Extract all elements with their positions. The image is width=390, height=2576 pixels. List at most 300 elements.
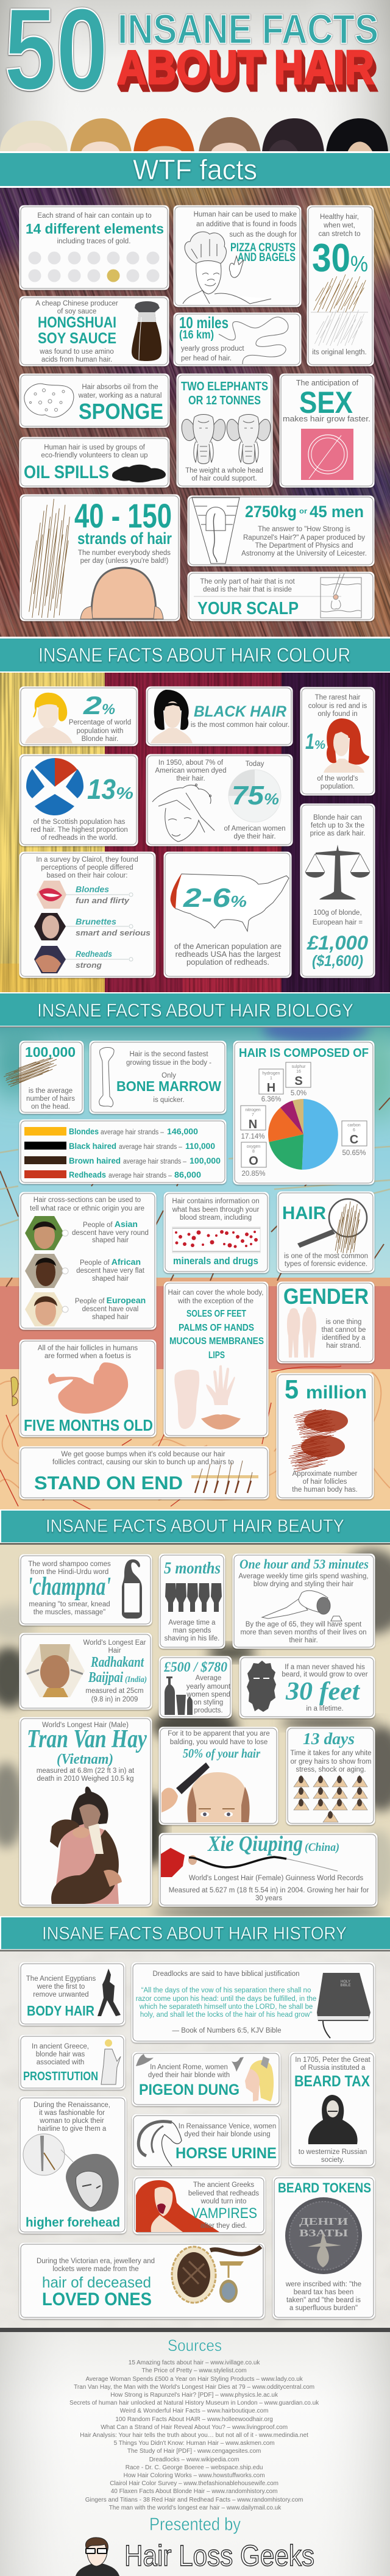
element: nitrogen: nitrogen — [245, 1108, 261, 1112]
heading: strands of hair: strands of hair — [77, 529, 172, 548]
panel: higher forehead — [20, 2098, 125, 2232]
heading: Vietnam: (Vietnam) — [57, 1751, 113, 1767]
section background: WTF — [0, 188, 390, 637]
legend: black haired: average hair strands – — [119, 1143, 183, 1151]
text: blondes: Blondes — [76, 885, 109, 894]
text: longest ear: World's Longest Ear — [83, 1639, 146, 1647]
legend: redheads: Redheads — [69, 1170, 106, 1179]
panel: body hair — [21, 1964, 124, 2024]
text: whole head: The weight a whole head — [185, 467, 263, 474]
text: weekly time: blow drying and styling their hair — [254, 1581, 353, 1588]
icon: balance scales — [305, 845, 370, 900]
heading: sponge: SPONGE — [79, 399, 163, 424]
element: carbon: 6 — [353, 1128, 355, 1132]
panel: your scalp — [189, 573, 373, 620]
text: ancient Greece: associated with — [37, 2059, 84, 2066]
panel: hour and 53 minutes — [234, 1555, 374, 1647]
text: sheds per day: The number everybody sheds — [78, 549, 171, 557]
panel: 14 different elements — [21, 207, 168, 288]
panel: dye 75% — [147, 756, 291, 845]
text: rarest: colour is red and is — [308, 703, 367, 710]
icon: USA map — [171, 874, 289, 931]
text: whole body: with the exception of the — [177, 1298, 254, 1305]
sources list: 15 Amazing facts about hair – www.ivillage.co.uk — [129, 2360, 260, 2366]
stat: 30%: 30 — [312, 235, 350, 280]
legend: black haired: 110,000 — [185, 1141, 215, 1151]
text: never shaved: If a man never shaved his — [285, 1664, 365, 1671]
text: age of 65: By the age of 65, they will have spent — [246, 1621, 362, 1628]
heading: oil spills: OIL SPILLS — [24, 462, 109, 482]
text: whole head: of hair could support. — [191, 475, 257, 482]
banner: hair biology — [0, 992, 390, 1028]
section background: colour — [0, 673, 390, 992]
panel: pigeon dung — [133, 2053, 279, 2105]
panel: 40-150 strands — [21, 496, 179, 620]
element: sulphur: sulphur — [292, 1065, 306, 1069]
text: weekly time: Average weekly time girls spend washing, — [238, 1573, 369, 1580]
icon: connector circle — [62, 1230, 68, 1236]
banner: hair beauty: INSANE FACTS ABOUT HAIR BEAUTY — [46, 1516, 344, 1536]
text: biblical: Dreadlocks are said to have biblical justification — [153, 1970, 299, 1978]
element: hydrogen: hydrogen — [262, 1072, 280, 1076]
heading: soles of feet: SOLES OF FEET — [186, 1309, 246, 1319]
panel: 10 miles — [175, 313, 300, 365]
panel: cross-sections and race — [21, 1193, 155, 1328]
text: additive: Human hair can be used to make — [194, 211, 297, 218]
sources list: The Study of Hair [PDF] - www.cengagesites.com — [127, 2448, 261, 2455]
sources list: What Can a Strand of Hair Reveal About You? – www.livingproof.com — [101, 2424, 288, 2431]
heading: sex: SEX — [299, 385, 353, 420]
text: only part: The only part of hair that is not — [200, 578, 295, 585]
legend: brown haired — [24, 1156, 221, 1165]
heading: Radhakant: Radhakant — [90, 1655, 144, 1670]
text: Peter the Great: In 1705, Peter the Great — [295, 2056, 370, 2064]
stat: 2-6: 2-6 — [183, 883, 231, 913]
text: time it takes: stress, shock or aging. — [296, 1766, 366, 1773]
element: oxygen: O — [249, 1154, 258, 1168]
element: hydrogen: 1 — [270, 1076, 272, 1081]
text: time it takes: or grey hairs to show from — [291, 1758, 371, 1766]
element: oxygen — [241, 1142, 266, 1178]
text: is quicker: is quicker. — [153, 1097, 185, 1104]
heading: black hair: BLACK HAIR — [194, 703, 286, 720]
heading: gender: GENDER — [283, 1284, 369, 1309]
icon: pigeon right — [232, 2057, 244, 2072]
text: producer: A cheap Chinese producer — [35, 300, 118, 307]
text: sheds per day: per day (unless you're bald!) — [80, 557, 169, 565]
text: never shaved: beard, it would grow to over — [282, 1671, 368, 1678]
text: inscribed: were inscribed with: "the — [285, 2281, 361, 2288]
element: sulphur: 5.0% — [291, 1090, 307, 1097]
element: oxygen: 20.85% — [241, 1170, 266, 1178]
icon: blonde woman — [25, 693, 73, 743]
stat: percent: % — [264, 790, 279, 808]
text: ancient Rome: dyed their hair blonde with — [148, 2072, 230, 2079]
heading: 14 different elements: 14 different elements — [26, 221, 164, 237]
icon: tweezers magnifier — [23, 2134, 73, 2175]
stat: $1,600: ($1,600) — [312, 953, 363, 970]
image: woman with long hair — [161, 1848, 338, 1877]
text: paper: The answer to "How Strong is — [258, 526, 350, 533]
text: goose bumps: We get goose bumps when it's cold because our hair — [61, 1451, 225, 1458]
text: longest female: World's Longest Hair (Female) Guinness World Records — [189, 1875, 363, 1882]
image: hair locket brooch — [172, 2247, 261, 2303]
stat: 1%: 1 — [305, 729, 314, 754]
icon: connector circle — [62, 1306, 68, 1312]
element: sulphur — [286, 1062, 311, 1097]
legend: black haired: Black haired — [69, 1141, 116, 1151]
heading: lips: LIPS — [208, 1350, 225, 1361]
text: absorbs oil: water, working as a natural — [78, 392, 161, 399]
icon: soy bottle — [132, 301, 161, 361]
legend: blondes: average hair strands – — [101, 1129, 165, 1136]
heading: higher forehead: higher forehead — [26, 2216, 120, 2230]
icon: oil blob — [112, 465, 166, 482]
heading: beard tokens: BEARD TOKENS — [278, 2180, 371, 2195]
heading: vampires: VAMPIRES — [191, 2205, 257, 2222]
panel: soy sauce — [21, 298, 168, 365]
text: or: or — [299, 507, 307, 515]
icon: Scottish flag circle — [26, 758, 83, 815]
text: Peter the Great: of Russia instituted a — [300, 2064, 366, 2072]
sources list: Race - Dr. C. George Boeree – webspace.ship.edu — [126, 2464, 263, 2471]
panel: forensic hair — [278, 1193, 373, 1272]
text: survey: perceptions of people differed — [41, 864, 133, 871]
logo: Hair Loss Geeks: Hair Loss Geeks — [124, 2540, 314, 2572]
text: only part: dead is the hair that is inside — [203, 586, 292, 593]
stat: 2%: 2 — [83, 691, 102, 720]
heading: sources: Sources — [168, 2336, 222, 2355]
text: meaning: the muscles, massage" — [34, 1609, 105, 1616]
banner: hair biology: INSANE FACTS ABOUT HAIR BIOLOGY — [37, 1000, 353, 1021]
footer background — [0, 2332, 390, 2576]
text: European: People of European — [75, 1295, 146, 1305]
text: follicles formed: are formed when a foetus is — [44, 1353, 131, 1360]
element: carbon: C — [350, 1133, 358, 1147]
panel: minerals and drugs — [165, 1193, 268, 1272]
stat: million: million — [306, 1383, 367, 1403]
text: measured: Measured at 5.627 m (18 ft 5.54 in) in 2004. Growing her hair for — [169, 1887, 369, 1894]
icon: Asian face hexagon — [25, 1216, 64, 1250]
panel: 50% balding — [160, 1728, 277, 1823]
heading: Baijpai: Baijpai — [88, 1670, 123, 1686]
text: paper: The Department of Physics and — [255, 542, 353, 549]
legend: redheads — [24, 1170, 201, 1179]
stat: 100,000: 100,000 — [25, 1044, 76, 1060]
text: Venice: In Renaissance Venice, women — [179, 2123, 276, 2130]
panel: pizza crusts and bagels — [175, 207, 300, 306]
text: shampoo: from the Hindi-Urdu word — [30, 1569, 108, 1576]
element: hydrogen — [259, 1069, 283, 1103]
heading: Tran Van Hay: Tran Van Hay — [27, 1725, 147, 1753]
text: measured: 30 years — [255, 1895, 282, 1902]
panel: 13 days — [288, 1728, 374, 1823]
text: original length: its original length. — [312, 349, 367, 356]
text: cannot be identified: hair strand. — [326, 1342, 361, 1350]
sources list: The Price of Pretty – www.stylelist.com — [141, 2367, 247, 2374]
panel: 2% blonde — [21, 688, 136, 745]
icon: European face hexagon — [25, 1292, 64, 1326]
banner: hair history: INSANE FACTS ABOUT HAIR HISTORY — [42, 1923, 347, 1944]
sources list: Weird & Wonderful Hair Facts – www.hairboutique.com — [120, 2408, 268, 2414]
heading: pizza crusts: PIZZA CRUSTS — [230, 242, 296, 254]
sources list: Tran Van Hay, the Man with the World's Longest Hair Dies at 79 – www.odditycentral.com — [74, 2384, 314, 2391]
icon: hair dryer — [262, 1590, 342, 1621]
text: additive: such as the dough for — [229, 231, 297, 238]
panel: champna — [21, 1556, 151, 1624]
legend: redheads: average hair strands – — [108, 1172, 172, 1179]
heading: loved ones: LOVED ONES — [42, 2289, 152, 2309]
legend: black haired — [24, 1141, 215, 1151]
banner: hair colour — [0, 637, 390, 673]
text: 100g: 100g of blonde, — [313, 909, 362, 917]
heading: five months old: FIVE MONTHS OLD — [24, 1416, 153, 1434]
text: volunteers: Human hair is used by groups of — [44, 444, 146, 451]
text: anticipation: The anticipation of — [296, 379, 359, 387]
icon: brunette hexagon — [34, 913, 66, 940]
stat: percent: % — [116, 784, 133, 803]
icon: foetus — [48, 1362, 128, 1414]
text: meaning: meaning "to smear, knead — [29, 1601, 110, 1608]
heading: minerals and drugs: minerals and drugs — [173, 1255, 258, 1267]
banner: hair beauty — [0, 1509, 390, 1545]
icon: tower — [192, 498, 239, 564]
panel: 5 months shaving — [160, 1555, 224, 1647]
text: strong: strong — [76, 961, 102, 970]
text: goose bumps: follicles contract, causing our skin to bunch up and hairs to — [52, 1459, 234, 1466]
text: volunteers: eco-friendly volunteers to clean up — [41, 452, 148, 459]
icon: hairs standing — [191, 1461, 258, 1494]
image: old man with long hair coil — [50, 1787, 122, 1904]
text: paper: Astronomy at the University of Leicester. — [241, 550, 367, 557]
text: common colour: is the most common hair colour. — [191, 721, 289, 729]
panel: longest ear hair — [21, 1634, 151, 1708]
text: measured: death in 2010 Weighed 10.5 kg — [37, 1775, 134, 1783]
stat: percent: % — [230, 892, 247, 911]
icon: hair clippers — [165, 1583, 222, 1612]
section background: history — [0, 1952, 390, 2328]
text: age of 65: more than seven months of their lives on — [240, 1629, 367, 1636]
text: fastest growing: growing tissue in the body - — [126, 1059, 211, 1067]
stat: 45 men: 45 men — [310, 503, 364, 521]
text: American population: population of redheads. — [186, 957, 269, 967]
text: fastest growing: Hair is the second fastest — [129, 1051, 208, 1058]
panel: vampires — [135, 2178, 264, 2233]
text: Asian: People of Asian — [83, 1219, 138, 1229]
panel: sex — [281, 375, 373, 486]
text: 100g: European hair = — [313, 919, 363, 926]
text: blood stream: Hair contains information on — [172, 1198, 260, 1205]
heading: Hongshuai: HONGSHUAI — [38, 314, 116, 331]
dark divider bar — [0, 2328, 390, 2332]
icon: elephants — [182, 415, 271, 463]
sources list: The man with the world's longest ear hair – www.dailymail.co.uk — [109, 2505, 282, 2511]
text: gross product: yearly gross product — [181, 345, 244, 352]
text: smart and serious: smart and serious — [76, 928, 151, 937]
text: yearly amount: products. — [194, 1707, 223, 1714]
text: world's population: of the world's — [317, 775, 358, 782]
text: Scottish population: of redheads in the world. — [41, 834, 118, 842]
element: sulphur: S — [294, 1075, 303, 1088]
text: ancient Greeks: believed that redheads — [188, 2190, 259, 2197]
text: Renaissance: hairline to give them a — [38, 2125, 107, 2133]
text: ancient Greeks: would turn into — [200, 2198, 246, 2205]
heading: 50% of your hair: 50% of your hair — [183, 1746, 261, 1761]
text: survey: In a survey by Clairol, they found — [36, 856, 138, 864]
panel: composition of hair — [235, 1042, 373, 1183]
text: survey: based on their hair colour: — [47, 872, 127, 879]
text: India: (India) — [125, 1675, 147, 1684]
element: nitrogen: 17.14% — [241, 1133, 265, 1140]
legend: brown haired: 100,000 — [190, 1156, 221, 1165]
text: average number: on the head. — [31, 1103, 70, 1111]
sources list: Secrets of human hair unlocked at Natural History Museum in London – www.guardian.co.uk — [69, 2400, 319, 2406]
text: longest male: World's Longest Hair (Male) — [42, 1722, 129, 1729]
icon: Greek woman — [101, 2039, 121, 2084]
heading: 16 km: (16 km) — [179, 329, 214, 342]
heading: 5 months: 5 months — [164, 1559, 221, 1577]
panel: beard tax — [291, 2053, 374, 2166]
icon: red-haired woman — [324, 718, 369, 773]
text: citation: — Book of Numbers 6:5, KJV Bible — [172, 2027, 281, 2034]
text: brunettes: Brunettes — [76, 917, 117, 926]
text: Egyptians: remove unwanted — [33, 1991, 89, 1998]
text: fetch price: Blonde hair can — [313, 814, 362, 821]
hair colour heads row — [0, 117, 388, 151]
text: healthy hair: can stretch to — [318, 231, 361, 238]
panel: gender — [278, 1283, 373, 1362]
text: forensic evidence: is one of the most common — [284, 1253, 368, 1260]
icon: foot — [174, 1370, 199, 1429]
icon: hair bundle — [3, 1050, 60, 1091]
sources list: 100 Random Facts About HAIR – www.holleewoodhair.org — [115, 2416, 273, 2423]
sources list: 5 Things You Didn't Know: Human Hair – www.askmen.com — [114, 2440, 275, 2447]
chart: 75% pie — [229, 770, 281, 822]
panel: blonde price — [302, 805, 374, 976]
text: Scottish population: red hair. The highest proportion — [30, 826, 128, 834]
image: bald man with brush — [161, 1762, 250, 1822]
panel: beard tokens — [274, 2178, 374, 2317]
panel: bone marrow — [91, 1042, 225, 1112]
panel: Tran Van Hay — [21, 1719, 151, 1905]
text: African: shaped hair — [92, 1275, 129, 1283]
element: hydrogen: 6.36% — [261, 1096, 281, 1103]
sources list: Hair Analysis: Your hair tells the truth about you… but not all of it - www.medindia.net — [80, 2432, 308, 2439]
text: grow faster: makes hair grow faster. — [283, 415, 370, 423]
heading: champna: 'champna' — [27, 1573, 111, 1601]
text: follicles formed: All of the hair follicles in humans — [38, 1345, 138, 1352]
text: American population: of the American population are — [174, 942, 282, 951]
text: time it takes: Time it takes for any white — [290, 1750, 372, 1757]
text: Victorian: lockets were made from the — [52, 2266, 139, 2273]
section background: biology — [0, 1028, 390, 1509]
stat: 75: 75 — [232, 781, 264, 810]
sources list: How Strong is Rapunzel's Hair? [PDF] – www.physics.le.ac.uk — [110, 2392, 278, 2399]
stat: percent: % — [102, 701, 115, 718]
banner: hair history — [0, 1916, 390, 1952]
sources list: Average Woman Spends £500 a Year on Hair Styling Products – www.lady.co.uk — [85, 2376, 303, 2383]
heading: bone marrow: BONE MARROW — [116, 1078, 221, 1094]
icon: bald head — [80, 568, 163, 619]
icon: Holy Bible: BIBLE — [340, 1984, 351, 1987]
icon: lips — [201, 1414, 241, 1429]
heading: hair is composed of: HAIR IS COMPOSED OF — [239, 1046, 369, 1060]
heading: 30 feet: 30 feet — [285, 1678, 360, 1706]
legend: brown haired: average hair strands – — [123, 1158, 187, 1165]
panel: Rapunzel — [189, 497, 373, 565]
element: oxygen: 8 — [252, 1150, 255, 1154]
text: shampoo: The word shampoo comes — [28, 1561, 111, 1568]
text: American women: dye their hair. — [233, 833, 276, 840]
icon: hair follicle — [321, 573, 361, 618]
text: whole body: Hair can cover the whole body, — [168, 1289, 264, 1297]
text: cannot be identified: that cannot be — [322, 1326, 366, 1334]
text: shaving: man spends — [173, 1627, 211, 1634]
text: fetch price: fetch up to 3x the — [311, 822, 364, 829]
text: African: descent have very flat — [76, 1267, 145, 1275]
text: cannot be identified: is one thing — [326, 1318, 361, 1326]
element: nitrogen: N — [249, 1118, 257, 1131]
legend: blondes: Blondes — [69, 1126, 99, 1136]
image: beard token coin: ВЗАТЫ — [299, 2227, 348, 2239]
icon: red hair mass — [288, 1401, 348, 1477]
text: longest ear: Hair — [108, 1647, 121, 1655]
text: ancient Greece: blonde hair was — [36, 2051, 85, 2058]
text: hair follicles: Approximate number — [292, 1470, 358, 1478]
icon: bearded man — [247, 1661, 276, 1712]
heading: palms of hands: PALMS OF HANDS — [179, 1323, 254, 1333]
panel: £500 styling — [160, 1658, 231, 1717]
image: Peter the Great portrait — [308, 2095, 358, 2144]
stat: 5: 5 — [285, 1375, 299, 1404]
text: world population: population with — [77, 728, 123, 735]
text: average number: number of hairs — [26, 1095, 75, 1103]
text: average number: is the average — [29, 1087, 73, 1095]
element: nitrogen — [241, 1106, 266, 1140]
heading: horse urine: HORSE URINE — [176, 2145, 277, 2162]
text: absorbs oil: Hair absorbs oil from the — [82, 384, 158, 391]
text: Scottish population: of the Scottish population has — [34, 818, 126, 826]
text: rarest: only found in — [317, 710, 358, 718]
icon: horse — [138, 2122, 182, 2166]
text: Egyptians: were the first to — [37, 1983, 85, 1991]
text: after they died: after they died. — [200, 2222, 247, 2230]
sources list: How Hair Coloring Works – www.howstuffworks.com — [124, 2472, 265, 2479]
panel: stretch 30% — [308, 207, 372, 365]
legend: blondes: 146,000 — [167, 1126, 198, 1136]
text: China: (China) — [305, 1841, 339, 1854]
text: apparent: For it to be apparent that you are — [168, 1730, 270, 1737]
quote: book of Numbers: “All the days of the vow of his separation there shall no — [141, 1987, 311, 1994]
element: sulphur: 16 — [296, 1070, 301, 1074]
icon: stretching hairs — [311, 274, 368, 346]
heading: 13 days: 13 days — [303, 1730, 355, 1748]
element: carbon — [342, 1121, 367, 1157]
heading: hair: HAIR — [282, 1203, 326, 1223]
text: measured: (9.8 in) in 2009 — [91, 1696, 138, 1703]
text: producer: of soy sauce — [57, 308, 96, 315]
icon: blood vessel — [172, 1227, 260, 1253]
text: yearly amount: yearly amount — [186, 1683, 231, 1690]
element: hydrogen: H — [267, 1081, 275, 1095]
banner: WTF facts — [0, 151, 390, 188]
header background — [0, 0, 390, 152]
icon: sponge — [24, 384, 74, 417]
text: inscribed: beard tax has been — [294, 2289, 353, 2296]
icon: African face hexagon — [25, 1254, 64, 1288]
heading: hair of deceased: hair of deceased — [42, 2274, 151, 2291]
image: beard token coin: ДЕНГИ — [299, 2216, 348, 2227]
